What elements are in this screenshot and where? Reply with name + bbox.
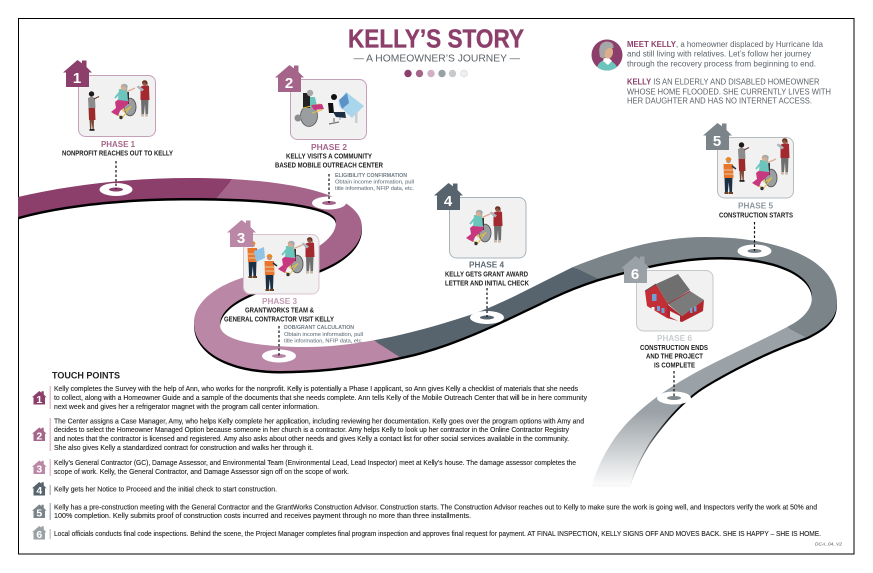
intro text: meet Kelly: MEET KELLY, a homeowner displaced by Hurricane Ida (627, 40, 824, 49)
card: phase 3 illustration (244, 234, 319, 294)
marker: phase 4 (470, 288, 504, 324)
marker: phase 1 (100, 161, 132, 196)
phase 3 caption: GRANTWORKS TEAM & (245, 308, 314, 315)
icon: house 6: 6 (631, 266, 639, 283)
touch point 5 (32, 503, 817, 520)
phase 6 caption (640, 345, 708, 370)
title (348, 26, 524, 64)
icon: house 2 (275, 65, 304, 92)
panel: phase 6 (621, 256, 713, 404)
icon: house 3: 3 (237, 230, 245, 247)
marker: phase 2 (312, 174, 346, 210)
title: KELLY’S STORY (348, 26, 524, 54)
phase 1 caption: NONPROFIT REACHES OUT TO KELLY (62, 150, 173, 158)
touch point 4 (32, 482, 277, 497)
panel: phase 4 (434, 183, 529, 324)
DOB grant note (284, 325, 363, 344)
phase 2 caption: BASED MOBILE OUTREACH CENTER (275, 163, 383, 170)
touch point 6 (32, 526, 821, 541)
touch point 3 (32, 459, 576, 476)
phase 6 caption: AND THE PROJECT (646, 354, 704, 361)
phase 2 caption (275, 154, 383, 170)
eligibility note: title information, NFIP data, etc. (335, 186, 414, 192)
card: phase 2 illustration (290, 80, 366, 140)
Kelly from behind (294, 90, 324, 126)
touch point 1: to collect, along with a Homeowner Guide and a sample of the documents that she needs complete. Ann tells Kelly of the Mobile Outreach Center that will be in here community (54, 395, 587, 402)
panel: phase 1 (62, 60, 173, 196)
DOB grant note: DOB/GRANT CALCULATION (284, 325, 354, 331)
eligibility note (335, 173, 414, 192)
phase 2 label: PHASE 2 (311, 142, 347, 152)
phase 6 caption: IS COMPLETE (654, 363, 695, 370)
phase 4 caption: KELLY GETS GRANT AWARD (445, 272, 528, 279)
icon: house 4: 4 (444, 193, 453, 210)
phase 3 caption (224, 308, 334, 324)
phase 1 label: PHASE 1 (101, 139, 135, 149)
touch points section (32, 371, 821, 541)
touch point 1 (32, 386, 587, 411)
eligibility note: ELIGIBILITY CONFIRMATION (335, 173, 407, 179)
touch point 2: and notes that the contractor is licensed and registered. Amy also asks about other needs and gives Kelly a contact list for other social services available in the community. (54, 436, 569, 443)
touch point 2: The Center assigns a Case Manager, Amy, who helps Kelly complete her application, including reviewing her documentation. Kelly goes over the program options with Amy and (54, 418, 584, 425)
intro text: meet Kelly: KELLY IS AN ELDERLY AND DISABLED HOMEOWNER (627, 78, 820, 87)
completed red house (645, 274, 704, 322)
icon: Kelly avatar (592, 40, 622, 72)
touch point 2: She also gives Kelly a standardized contract for construction and walks her through it. (54, 445, 313, 452)
touch points heading: TOUCH POINTS (52, 371, 120, 382)
subtitle: — A HOMEOWNER’S JOURNEY — (354, 52, 520, 64)
phase 4 label: PHASE 4 (469, 260, 504, 270)
marker: phase 6 (657, 371, 691, 404)
icon: house 6 (621, 256, 650, 283)
phase 5 label: PHASE 5 (738, 201, 773, 211)
touch point 1: next week and gives her a refrigerator magnet with the program call center information. (54, 404, 319, 411)
document code: DCA_04_V2 (815, 542, 842, 548)
touch point 3: scope of work. Kelly, the General Contractor, and Damage Assessor sign off on the scope of work. (54, 469, 349, 476)
icon: house 5: 5 (713, 133, 721, 150)
card: phase 6 illustration (636, 270, 713, 331)
phase 3 label: PHASE 3 (262, 296, 297, 306)
intro text: meet Kelly (627, 40, 831, 105)
card: phase 4 illustration (450, 198, 526, 258)
eligibility note: Obtain income information, pull (335, 180, 414, 186)
touch point 1: 1 (36, 394, 42, 406)
touch point 5: 5 (36, 508, 42, 520)
phase 6 label: PHASE 6 (657, 333, 692, 343)
phase 6 caption: CONSTRUCTION ENDS (640, 345, 708, 352)
intro text: meet Kelly: HER DAUGHTER AND HAS NO INTERNET ACCESS. (627, 96, 812, 105)
touch point 4: 4 (36, 485, 42, 497)
card: phase 1 illustration (78, 76, 156, 136)
panel: phase 3 (224, 220, 363, 362)
touch point 2 (32, 418, 584, 452)
desk scene (328, 92, 364, 124)
icon: house 4 (434, 183, 463, 210)
DOB grant note: title information, NFIP data, etc. (284, 338, 363, 344)
winding journey road (18, 178, 837, 486)
panel: phase 5 (703, 123, 794, 258)
marker: phase 5 (738, 222, 772, 258)
phase 4 caption (445, 272, 529, 288)
touch point 2: decides to select the Homeowner Managed Option because someone in her church is a contractor. Amy helps Kelly to look up her contractor in the Online Contractor Registry (54, 427, 569, 434)
panel: phase 2 (275, 65, 414, 210)
touch point 1: Kelly completes the Survey with the help of Ann, who works for the nonprofit. Kelly is potentially a Phase I applicant, so Ann gives Kelly a checklist of materials that she needs (54, 386, 578, 393)
intro text: meet Kelly: WHOSE HOME FLOODED. SHE CURRENTLY LIVES WITH (627, 88, 831, 97)
touch point 5: 100% completion. Kelly submits proof of construction costs incurred and receives payment through no more than three installments. (54, 513, 471, 520)
marker: phase 3 (262, 326, 296, 362)
card: phase 5 illustration (718, 138, 794, 198)
touch point 4: Kelly gets her Notice to Proceed and the initial check to start construction. (54, 487, 277, 494)
icon: house 2: 2 (285, 75, 293, 92)
DOB grant note: Obtain income information, pull (284, 332, 363, 338)
icon: house 1: 1 (73, 70, 81, 87)
touch point 5: Kelly has a pre-construction meeting with the General Contractor and the GrantWorks Construction Advisor. Construction starts. The Construction Advisor reaches out to Kelly to make sure the work is going well, and Inspectors verify the work at 50% and (54, 504, 817, 511)
touch point 6: 6 (36, 529, 42, 541)
phase 4 caption: LETTER AND INITIAL CHECK (445, 281, 529, 288)
phase progress dots (404, 70, 468, 77)
phase 5 caption: CONSTRUCTION STARTS (719, 212, 793, 219)
phase 2 caption: KELLY VISITS A COMMUNITY (286, 154, 372, 161)
touch point 3: Kelly’s General Contractor (GC), Damage Assessor, and Environmental Team (Environmental Lead, Lead Inspector) meet at Kelly’s house. The damage assessor completes the (54, 460, 576, 467)
intro text: meet Kelly: and still living with relatives. Let’s follow her journey (627, 50, 811, 58)
touch point 2: 2 (36, 430, 42, 442)
touch point 3: 3 (36, 464, 42, 476)
phase 3 caption: GENERAL CONTRACTOR VISIT KELLY (224, 317, 334, 324)
touch point 6: Local officials conducts final code inspections. Behind the scene, the Project Manager completes final program inspection and approves final request for payment. AT FINAL INSPECTION, KELLY SIGNS OFF AND MOVES BACK. SHE IS HAPPY – SHE IS HOME. (54, 531, 821, 538)
icon: house 3 (227, 220, 256, 247)
intro text: meet Kelly: through the recovery process from beginning to end. (627, 59, 816, 68)
